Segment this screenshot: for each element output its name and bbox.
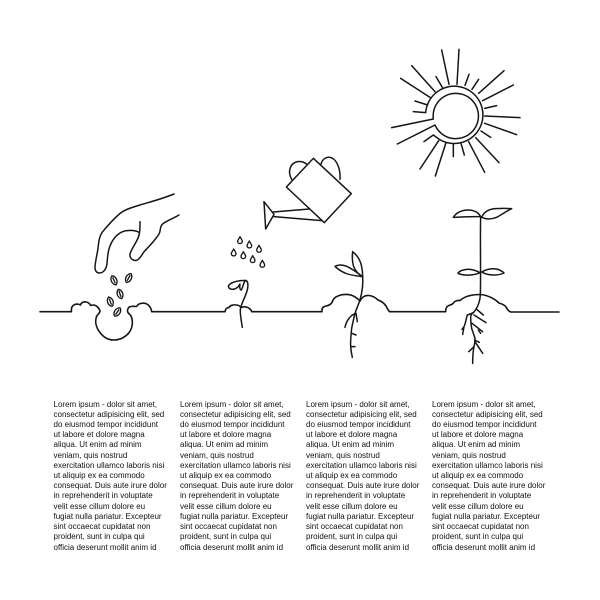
text column 3: fugiat nulla pariatur. Excepteur xyxy=(306,512,414,521)
sun rays xyxy=(401,49,520,176)
text column 1: do eiusmod tempor incididunt xyxy=(54,420,158,429)
text column 3: sint occaecat cupidatat non xyxy=(306,522,403,531)
text column 3 xyxy=(306,400,420,552)
young plant xyxy=(453,208,512,363)
text column 4: officia deserunt mollit anim id xyxy=(432,543,535,552)
text column 3: consequat. Duis aute irure dolor xyxy=(306,481,419,490)
root branches xyxy=(462,309,486,353)
text column 3: veniam, quis nostrud xyxy=(306,451,380,460)
text column 4 xyxy=(432,400,546,552)
text column 2: do eiusmod tempor incididunt xyxy=(180,420,285,429)
text column 4: fugiat nulla pariatur. Excepteur xyxy=(432,512,540,521)
text column 4: exercitation ullamco laboris nisi xyxy=(432,461,543,470)
can body xyxy=(286,158,351,223)
text column 1: velit esse cillum dolore eu xyxy=(54,502,145,511)
text column 3: consectetur adipisicing elit, sed xyxy=(306,410,417,419)
text column 3: ut labore et dolore magna xyxy=(306,430,397,439)
text column 1 xyxy=(54,400,167,552)
spout xyxy=(264,202,322,229)
text column 4: ut aliquip ex ea commodo xyxy=(432,471,523,480)
text column 1: fugiat nulla pariatur. Excepteur xyxy=(54,512,162,521)
text column 4: aliqua. Ut enim ad minim xyxy=(432,440,520,449)
text column 3: officia deserunt mollit anim id xyxy=(306,543,409,552)
text column 1: ut labore et dolore magna xyxy=(54,430,145,439)
text column 1: exercitation ullamco laboris nisi xyxy=(54,461,164,470)
text column 4: Lorem ipsum - dolor sit amet, xyxy=(432,400,536,408)
text column 2: officia deserunt mollit anim id xyxy=(180,543,283,552)
text column 1: consectetur adipisicing elit, sed xyxy=(54,410,164,419)
seeds xyxy=(106,272,133,318)
text column 4: do eiusmod tempor incididunt xyxy=(432,420,537,429)
text column 4: in reprehenderit in voluptate xyxy=(432,491,531,500)
text column 2: consequat. Duis aute irure dolor xyxy=(180,481,293,490)
small sprout xyxy=(228,280,248,327)
text column 2: ut aliquip ex ea commodo xyxy=(180,471,271,480)
text column 2: consectetur adipisicing elit, sed xyxy=(180,410,291,419)
text column 3: velit esse cillum dolore eu xyxy=(306,502,398,511)
text column 3: ut aliquip ex ea commodo xyxy=(306,471,397,480)
text column 1: consequat. Duis aute irure dolor xyxy=(54,481,167,490)
stem and main root xyxy=(471,217,481,363)
seedling top leaf xyxy=(352,252,363,277)
middle leaves xyxy=(458,269,504,275)
seedling root branches xyxy=(345,313,357,347)
sun xyxy=(392,49,520,176)
text column 4: ut labore et dolore magna xyxy=(432,430,523,439)
text column 2: velit esse cillum dolore eu xyxy=(180,502,272,511)
text column 2: exercitation ullamco laboris nisi xyxy=(180,461,291,470)
text column 3: in reprehenderit in voluptate xyxy=(306,491,405,500)
sun outer ring xyxy=(413,86,483,144)
watering can, drops and plants xyxy=(228,157,363,357)
text column 3: do eiusmod tempor incididunt xyxy=(306,420,411,429)
seedling stem and roots xyxy=(351,277,363,357)
fingers xyxy=(130,215,179,260)
text column 2: veniam, quis nostrud xyxy=(180,451,254,460)
text column 1: Lorem ipsum - dolor sit amet, xyxy=(54,400,157,408)
text column 1: veniam, quis nostrud xyxy=(54,451,127,460)
text column 2: ut labore et dolore magna xyxy=(180,430,271,439)
text column 4: sint occaecat cupidatat non xyxy=(432,522,529,531)
text column 4: proident, sunt in culpa qui xyxy=(432,532,523,541)
text column 2 xyxy=(180,400,294,552)
text column 1: in reprehenderit in voluptate xyxy=(54,491,153,500)
text column 2: sint occaecat cupidatat non xyxy=(180,522,277,531)
sun inner ring xyxy=(392,93,478,144)
text column 2: in reprehenderit in voluptate xyxy=(180,491,279,500)
text column 1: officia deserunt mollit anim id xyxy=(54,543,157,552)
text column 1: sint occaecat cupidatat non xyxy=(54,522,150,531)
text column 4: velit esse cillum dolore eu xyxy=(432,502,524,511)
can handles xyxy=(290,157,340,179)
text column 2: fugiat nulla pariatur. Excepteur xyxy=(180,512,288,521)
text column 2: proident, sunt in culpa qui xyxy=(180,532,271,541)
hand xyxy=(95,194,174,273)
text column 3: proident, sunt in culpa qui xyxy=(306,532,397,541)
text column 1: ut aliquip ex ea commodo xyxy=(54,471,145,480)
hand dropping seeds xyxy=(95,194,179,318)
text column 1: proident, sunt in culpa qui xyxy=(54,532,145,541)
water drops xyxy=(231,237,265,267)
top leaves xyxy=(453,208,512,219)
text column 3: Lorem ipsum - dolor sit amet, xyxy=(306,400,410,408)
text column 3: aliqua. Ut enim ad minim xyxy=(306,440,394,449)
text column 2: aliqua. Ut enim ad minim xyxy=(180,440,268,449)
text column 4: consectetur adipisicing elit, sed xyxy=(432,410,543,419)
text column 2: Lorem ipsum - dolor sit amet, xyxy=(180,400,284,408)
text column 3: exercitation ullamco laboris nisi xyxy=(306,461,417,470)
seedling left leaf xyxy=(335,265,363,277)
text column 4: veniam, quis nostrud xyxy=(432,451,506,460)
text column 1: aliqua. Ut enim ad minim xyxy=(54,440,142,449)
text column 4: consequat. Duis aute irure dolor xyxy=(432,481,545,490)
ground line with soil mounds xyxy=(40,294,559,340)
